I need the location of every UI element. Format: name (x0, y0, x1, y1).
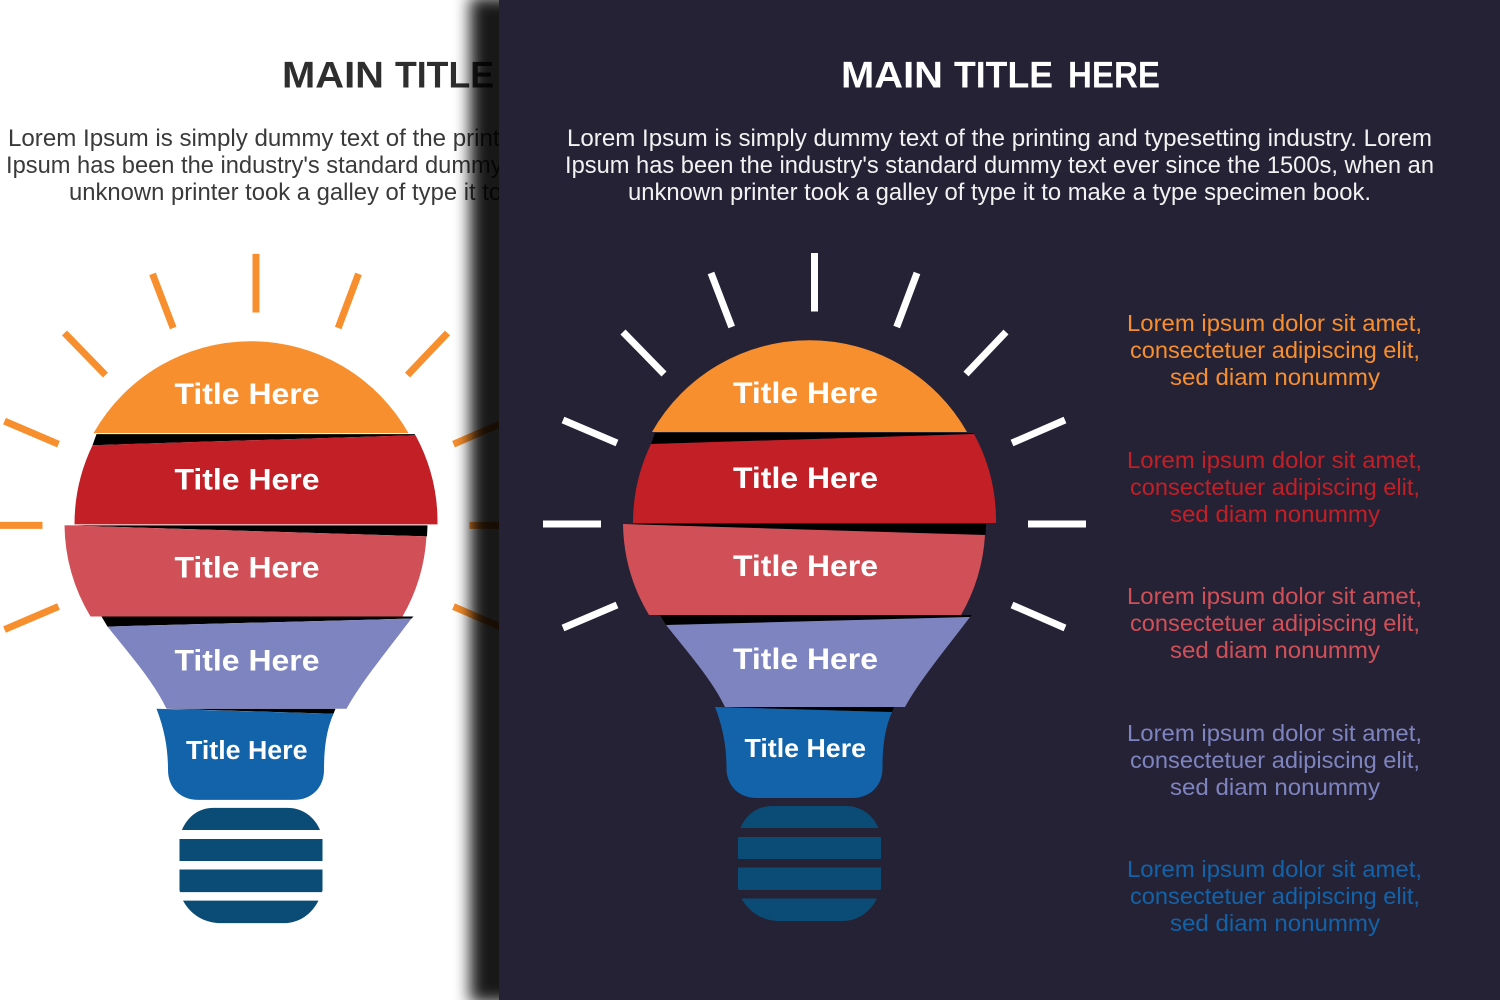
callout: red description (1127, 447, 1422, 527)
title: dark: HERE (1068, 54, 1160, 96)
callout: purple description: Lorem ipsum dolor sit amet, (1127, 720, 1422, 746)
text block: light intro: Ipsum has been the industry's standard dummy text ever since the 1500s, when an (6, 152, 875, 179)
segment 4: purple: Title Here (733, 643, 878, 676)
title: dark: MAIN (841, 54, 943, 96)
title: light: TITLE (395, 54, 494, 96)
text block: dark intro: Ipsum has been the industry's standard dummy text ever since the 1500s, when an (565, 152, 1434, 179)
callout: purple description: consectetuer adipiscing elit, (1130, 747, 1420, 773)
callout: blue description (1127, 856, 1422, 936)
segment 3: pink: Title Here (174, 551, 320, 584)
segment 4: purple: Title Here (174, 645, 320, 678)
callout: red description: Lorem ipsum dolor sit amet, (1127, 447, 1422, 473)
bulb base: striped screw (180, 808, 322, 923)
title: light (282, 54, 601, 96)
segment 3: pink: Title Here (733, 550, 878, 583)
gaps: black wedges (623, 433, 986, 712)
callout: purple description: sed diam nonummy (1170, 774, 1381, 800)
shadow: dark panel edge (470, 0, 560, 1000)
callout: orange description: Lorem ipsum dolor sit amet, (1127, 310, 1422, 336)
callout: blue description: Lorem ipsum dolor sit amet, (1127, 856, 1422, 882)
segment 2: red (74, 435, 438, 524)
segment 5: blue: Title Here (186, 735, 308, 765)
gaps: black wedges (64, 434, 428, 714)
title: light: MAIN (282, 54, 384, 96)
title: dark: TITLE (954, 54, 1053, 96)
panel: dark version (499, 0, 1500, 1000)
segment 4: purple (660, 615, 970, 707)
segment 1: orange (94, 341, 408, 433)
rays (543, 253, 1086, 628)
callout: pink description: consectetuer adipiscing elit, (1130, 610, 1420, 636)
callout: pink description: Lorem ipsum dolor sit amet, (1127, 583, 1422, 609)
callout: pink description (1127, 583, 1422, 663)
callout: purple description (1127, 720, 1422, 800)
callout: orange description (1127, 310, 1422, 390)
segment 4: purple (102, 617, 412, 709)
callout: blue description: sed diam nonummy (1170, 910, 1381, 936)
icon: light bulb, orange rays (0, 254, 528, 923)
icon: dark bulb, white rays (543, 253, 1086, 921)
segment 5: blue: Title Here (744, 733, 866, 763)
text block: dark intro (565, 125, 1434, 206)
callout: orange description: sed diam nonummy (1170, 364, 1381, 390)
segment 5: blue (715, 707, 892, 798)
text block: light intro (6, 125, 875, 206)
background: dark navy (499, 0, 1500, 1000)
title: light: HERE (509, 54, 601, 96)
title: dark (841, 54, 1160, 96)
panel: light version (0, 0, 875, 1000)
segment 1: orange: Title Here (733, 377, 878, 410)
text block: light intro: Lorem Ipsum is simply dummy text of the printing and typesetting industry. Lorem (8, 125, 873, 152)
text block: dark intro: Lorem Ipsum is simply dummy text of the printing and typesetting industry. Lorem (567, 125, 1432, 152)
segment 2: red: Title Here (733, 462, 878, 495)
callout: pink description: sed diam nonummy (1170, 637, 1381, 663)
segment 3: pink (623, 524, 985, 615)
segment 2: red: Title Here (174, 463, 320, 496)
callout: orange description: consectetuer adipiscing elit, (1130, 337, 1420, 363)
callout: red description: consectetuer adipiscing elit, (1130, 474, 1420, 500)
segment 5: blue (156, 709, 334, 800)
rays (0, 254, 528, 630)
text block: dark intro: unknown printer took a galley of type it to make a type specimen book. (628, 179, 1371, 206)
callout: red description: sed diam nonummy (1170, 501, 1381, 527)
segment 1: orange: Title Here (174, 378, 320, 411)
text block: light intro: unknown printer took a galley of type it to make a type specimen book. (69, 179, 812, 206)
segment 2: red (633, 434, 996, 523)
bulb base: striped screw (738, 806, 881, 921)
callout: blue description: consectetuer adipiscing elit, (1130, 883, 1420, 909)
segment 1: orange (652, 340, 967, 432)
background: white (0, 0, 520, 1000)
segment 3: pink (64, 525, 426, 617)
